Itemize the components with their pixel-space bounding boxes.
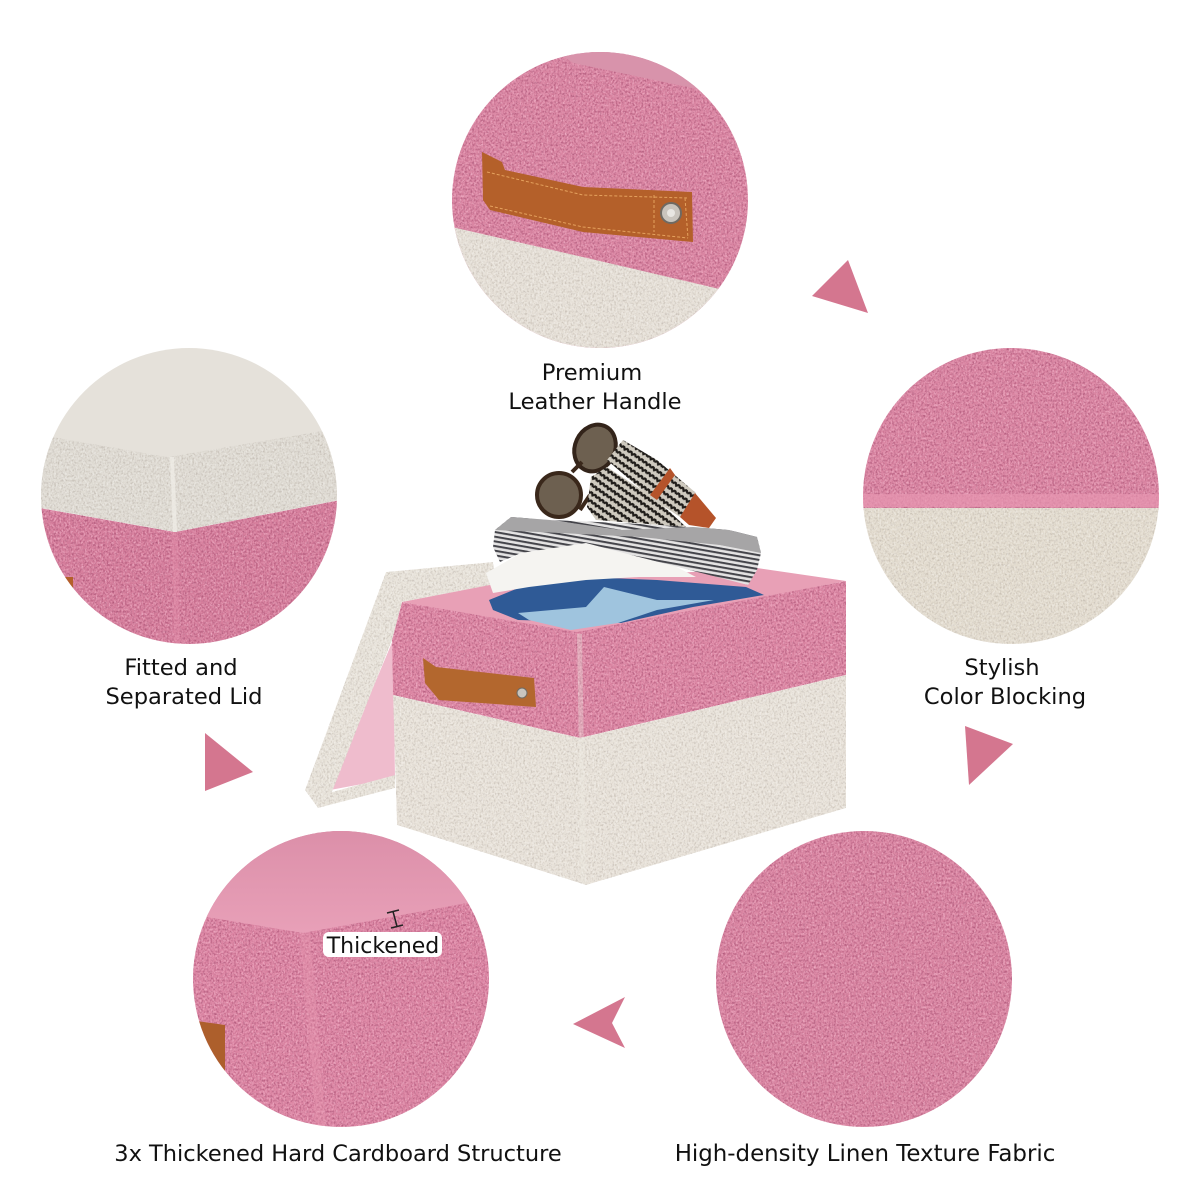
icon: box handle: [423, 658, 536, 707]
lid inside: [330, 640, 395, 790]
jeans: [489, 577, 764, 623]
callout: thickened label: [323, 910, 442, 959]
panel: leather handle detail: [450, 40, 750, 350]
arrow: right: [965, 726, 1013, 785]
icon: handle fragment: [199, 1021, 225, 1071]
lid leaning: [305, 562, 496, 808]
light denim: [518, 587, 714, 630]
heading: stylish color blocking: Stylish: [964, 655, 1040, 681]
heading: cardboard structure: 3x Thickened Hard Cardboard Structure: [114, 1141, 562, 1167]
clothes stack: [486, 517, 764, 630]
heading: linen fabric: High-density Linen Texture Fabric: [675, 1141, 1055, 1167]
heading: stylish color blocking: Color Blocking: [924, 684, 1086, 710]
heading: premium leather handle: Leather Handle: [508, 389, 682, 415]
grey ruffle: [495, 517, 761, 553]
heading: fitted and separated lid: Fitted and: [124, 655, 238, 681]
icon: leather handle: [482, 152, 693, 242]
corner highlight: [577, 634, 586, 885]
white shirt: [486, 543, 696, 593]
panel: thickened cardboard detail: [190, 825, 490, 1130]
rolled belt: [587, 440, 716, 528]
panel: linen texture detail: [714, 830, 1014, 1130]
sunglasses: [537, 418, 623, 517]
heading: premium leather handle: Premium: [542, 360, 642, 386]
panel: fitted lid detail: [40, 345, 340, 650]
striped garment: [493, 517, 761, 585]
panel: color blocking detail: [860, 345, 1165, 648]
arrow: top right: [812, 260, 868, 313]
heading: fitted and separated lid: Separated Lid: [105, 684, 263, 710]
arrow: left: [205, 733, 253, 791]
illustration: storage box with clothes: [305, 418, 846, 885]
box interior: [402, 568, 846, 634]
arrow: bottom: [573, 997, 625, 1048]
callout: thickened label: Thickened: [326, 934, 439, 959]
cream body: [393, 675, 846, 885]
pink band: [392, 581, 846, 738]
